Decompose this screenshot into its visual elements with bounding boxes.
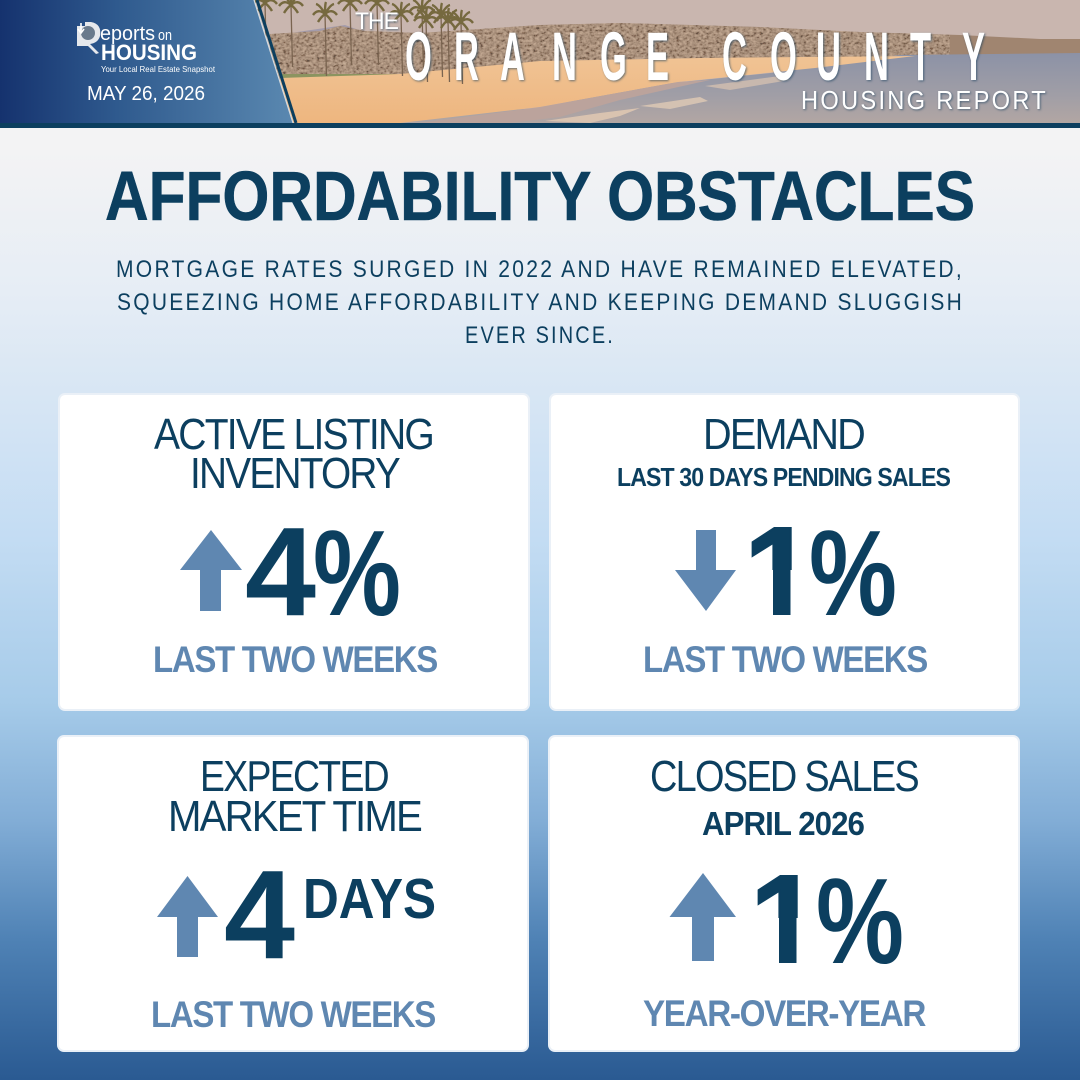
panel: demand — [550, 394, 1019, 710]
value: 1%: 1 — [750, 849, 820, 990]
intro paragraph: SQUEEZING HOME AFFORDABILITY AND KEEPING DEMAND SLUGGISH — [117, 289, 964, 316]
panel: closed sales — [549, 736, 1019, 1051]
value: 1%: % — [816, 853, 904, 989]
intro paragraph — [116, 256, 964, 349]
heading: ACTIVE LISTING — [154, 410, 433, 459]
heading: CLOSED SALES — [650, 752, 919, 801]
value: 4%: 4 — [245, 501, 316, 642]
period label: YEAR-OVER-YEAR — [643, 993, 926, 1034]
heading: MARKET TIME — [168, 792, 422, 841]
value: 1%: 1 — [744, 501, 814, 642]
header title: ORANGE COUNTY: ORANGE COUNTY — [405, 18, 985, 95]
date: MAY 26, 2026 — [87, 83, 205, 105]
subheading: APRIL 2026 — [702, 805, 865, 842]
heading: DEMAND — [703, 410, 864, 459]
logo: Reports on Housing — [77, 22, 216, 74]
value: 1% — [752, 527, 894, 616]
heading: EXPECTED — [200, 752, 388, 801]
heading: INVENTORY — [190, 449, 400, 498]
subheading: LAST 30 DAYS PENDING SALES — [617, 462, 951, 492]
logo: Reports on Housing: eports — [100, 23, 155, 45]
icon: up arrow — [180, 530, 242, 611]
icon: down arrow — [675, 530, 736, 611]
heading — [154, 410, 433, 498]
unit: days: DAYS — [303, 867, 436, 931]
value: 4% — [245, 501, 401, 642]
period label: LAST TWO WEEKS — [643, 639, 928, 680]
beach photo — [240, 0, 1080, 123]
icon: up arrow — [157, 876, 218, 957]
value: 1%: % — [809, 505, 897, 641]
panel: active listing inventory — [59, 394, 529, 710]
intro paragraph: MORTGAGE RATES SURGED IN 2022 AND HAVE REMAINED ELEVATED, — [116, 256, 964, 283]
logo: Reports on Housing: Your Local Real Estate Snapshot — [101, 64, 216, 74]
icon: up arrow — [670, 873, 736, 961]
value: 4%: % — [313, 505, 401, 641]
panel: expected market time — [58, 736, 528, 1051]
logo icon — [77, 22, 100, 54]
header bottom band — [0, 123, 1080, 128]
left panel — [0, 0, 293, 123]
intro paragraph: EVER SINCE. — [465, 322, 615, 349]
header title: HOUSING REPORT: HOUSING REPORT — [801, 85, 1048, 115]
value: 1% — [758, 875, 902, 964]
header title: THE: THE — [355, 8, 398, 35]
period label: LAST TWO WEEKS — [153, 639, 438, 680]
value: 4: 4 — [224, 844, 295, 985]
panel edge — [254, 0, 293, 123]
period label: LAST TWO WEEKS — [151, 994, 436, 1035]
logo: Reports on Housing: HOUSING — [101, 40, 197, 65]
logo: Reports on Housing: on — [158, 27, 172, 44]
heading — [168, 752, 422, 841]
header banner — [0, 0, 1080, 128]
